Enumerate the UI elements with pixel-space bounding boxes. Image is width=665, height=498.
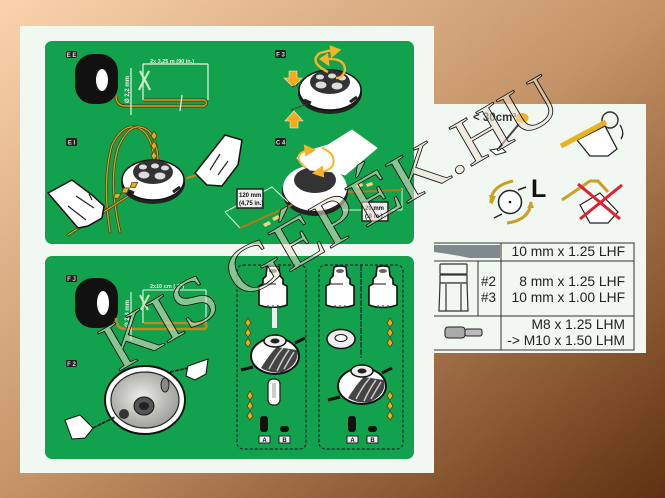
gear head 1	[259, 266, 287, 308]
shaft	[272, 308, 277, 328]
hash labels: #2	[481, 274, 496, 289]
row 2 values: 8 mm x 1.25 LHF	[519, 274, 625, 289]
part labels: B	[370, 438, 375, 444]
step label: F J	[67, 277, 76, 283]
gear head 2	[326, 266, 354, 308]
diameter text: Ø 2,4 mm	[125, 300, 131, 327]
icon: nut	[439, 264, 468, 311]
icon: crossed wrong stick	[562, 181, 622, 223]
length text: 2x10 cm (.7")	[150, 284, 184, 290]
step label	[66, 275, 77, 283]
gear head 3	[369, 266, 397, 308]
icon: line reel	[75, 54, 118, 104]
dashed box: left assembly	[237, 265, 306, 449]
watermark: KIS GÉPÉK.HU	[87, 59, 572, 385]
orange line loop	[116, 96, 206, 106]
callout: 120 mm	[237, 189, 263, 208]
icon: open disc	[105, 366, 185, 434]
row 1 swatch	[434, 245, 500, 258]
part labels: A	[350, 438, 355, 444]
icon: stick in gear head	[561, 112, 623, 156]
pinch arrow down	[284, 71, 302, 87]
main white sheet	[20, 26, 434, 473]
icon: hand pressing spool	[297, 130, 377, 175]
icon: oil syringe	[490, 113, 528, 155]
part labels: A	[262, 438, 267, 444]
spool threaded	[121, 160, 185, 204]
right hand	[186, 359, 208, 380]
spool top right	[298, 70, 362, 114]
row 3 values: M8 x 1.25 LHM	[531, 317, 625, 332]
step label H	[275, 138, 286, 146]
row 3 values	[507, 317, 625, 348]
icon: scissors	[139, 71, 150, 90]
right fingers	[210, 154, 228, 175]
dome 1	[241, 335, 305, 374]
row 1 value: 10 mm x 1.25 LHF	[512, 244, 625, 259]
orange line loop highlight	[116, 96, 206, 106]
callout: 20 mm	[362, 202, 388, 221]
orange short loop	[116, 318, 206, 329]
step label G: F 3	[276, 52, 285, 58]
part labels	[259, 436, 378, 444]
right white sheet	[434, 104, 646, 353]
left fingers	[68, 194, 94, 220]
icon: right hand	[195, 135, 242, 186]
panel: line winding, upper green panel	[45, 41, 414, 244]
panel: lower green panel	[45, 256, 414, 459]
icon: rotation direction	[489, 181, 534, 223]
step label G	[275, 50, 286, 58]
dashed divider	[360, 265, 362, 358]
washer	[327, 330, 355, 348]
length diagram lines	[225, 187, 402, 228]
step label E	[66, 51, 77, 59]
left hand	[65, 415, 93, 439]
icon: left hand	[48, 180, 104, 228]
specification table	[434, 243, 634, 350]
lines to hands	[93, 368, 188, 428]
icon: scissors	[140, 295, 149, 310]
callout: 20 mm: 20 mm	[365, 206, 384, 212]
step label E: E E	[67, 53, 76, 59]
step label F: E I	[68, 140, 75, 146]
diameter text: Ø 2,2 mm	[125, 76, 131, 103]
hash labels: #3	[481, 290, 496, 305]
yellow arrows on wires	[112, 131, 227, 201]
length text: 2x 3,25 m (90 in.)	[150, 59, 194, 65]
orange wires through spool	[68, 127, 197, 235]
step label F	[66, 138, 77, 146]
row 2 values: 10 mm x 1.00 LHF	[512, 290, 625, 305]
rotation arrows	[316, 47, 345, 78]
dashed box: right assembly	[319, 265, 403, 449]
step label	[66, 360, 77, 368]
rotation letter L: L	[531, 175, 546, 203]
step label: F 2	[67, 362, 76, 368]
hash labels	[481, 274, 496, 305]
wire right	[348, 190, 402, 192]
thin line ends	[291, 83, 307, 110]
oil quantity text: < 30cm³	[473, 112, 516, 124]
yellow arrows	[263, 182, 373, 227]
callout: 120 mm: 120 mm	[239, 193, 261, 199]
part labels: B	[282, 438, 287, 444]
bolt sleeve	[268, 379, 280, 405]
dome 2	[328, 365, 392, 404]
spool lower right	[282, 165, 348, 216]
callout: 120 mm: (4,75 in.)	[239, 201, 263, 207]
callout: 20 mm: (.8 in.)	[365, 214, 383, 220]
icon: bolt	[445, 327, 482, 338]
pinch arrow up	[285, 111, 303, 128]
arrows columns	[245, 318, 393, 420]
rotation arrows on hand	[298, 146, 334, 176]
dimension lines	[131, 290, 206, 340]
wire left	[240, 205, 292, 228]
dimension lines	[131, 64, 208, 115]
step label H: C 4	[276, 140, 286, 146]
row 3 values: -> M10 x 1.50 LHM	[507, 333, 625, 348]
icon: line reel	[75, 278, 118, 328]
row 2 values	[512, 274, 625, 305]
parts A and B	[260, 416, 377, 432]
